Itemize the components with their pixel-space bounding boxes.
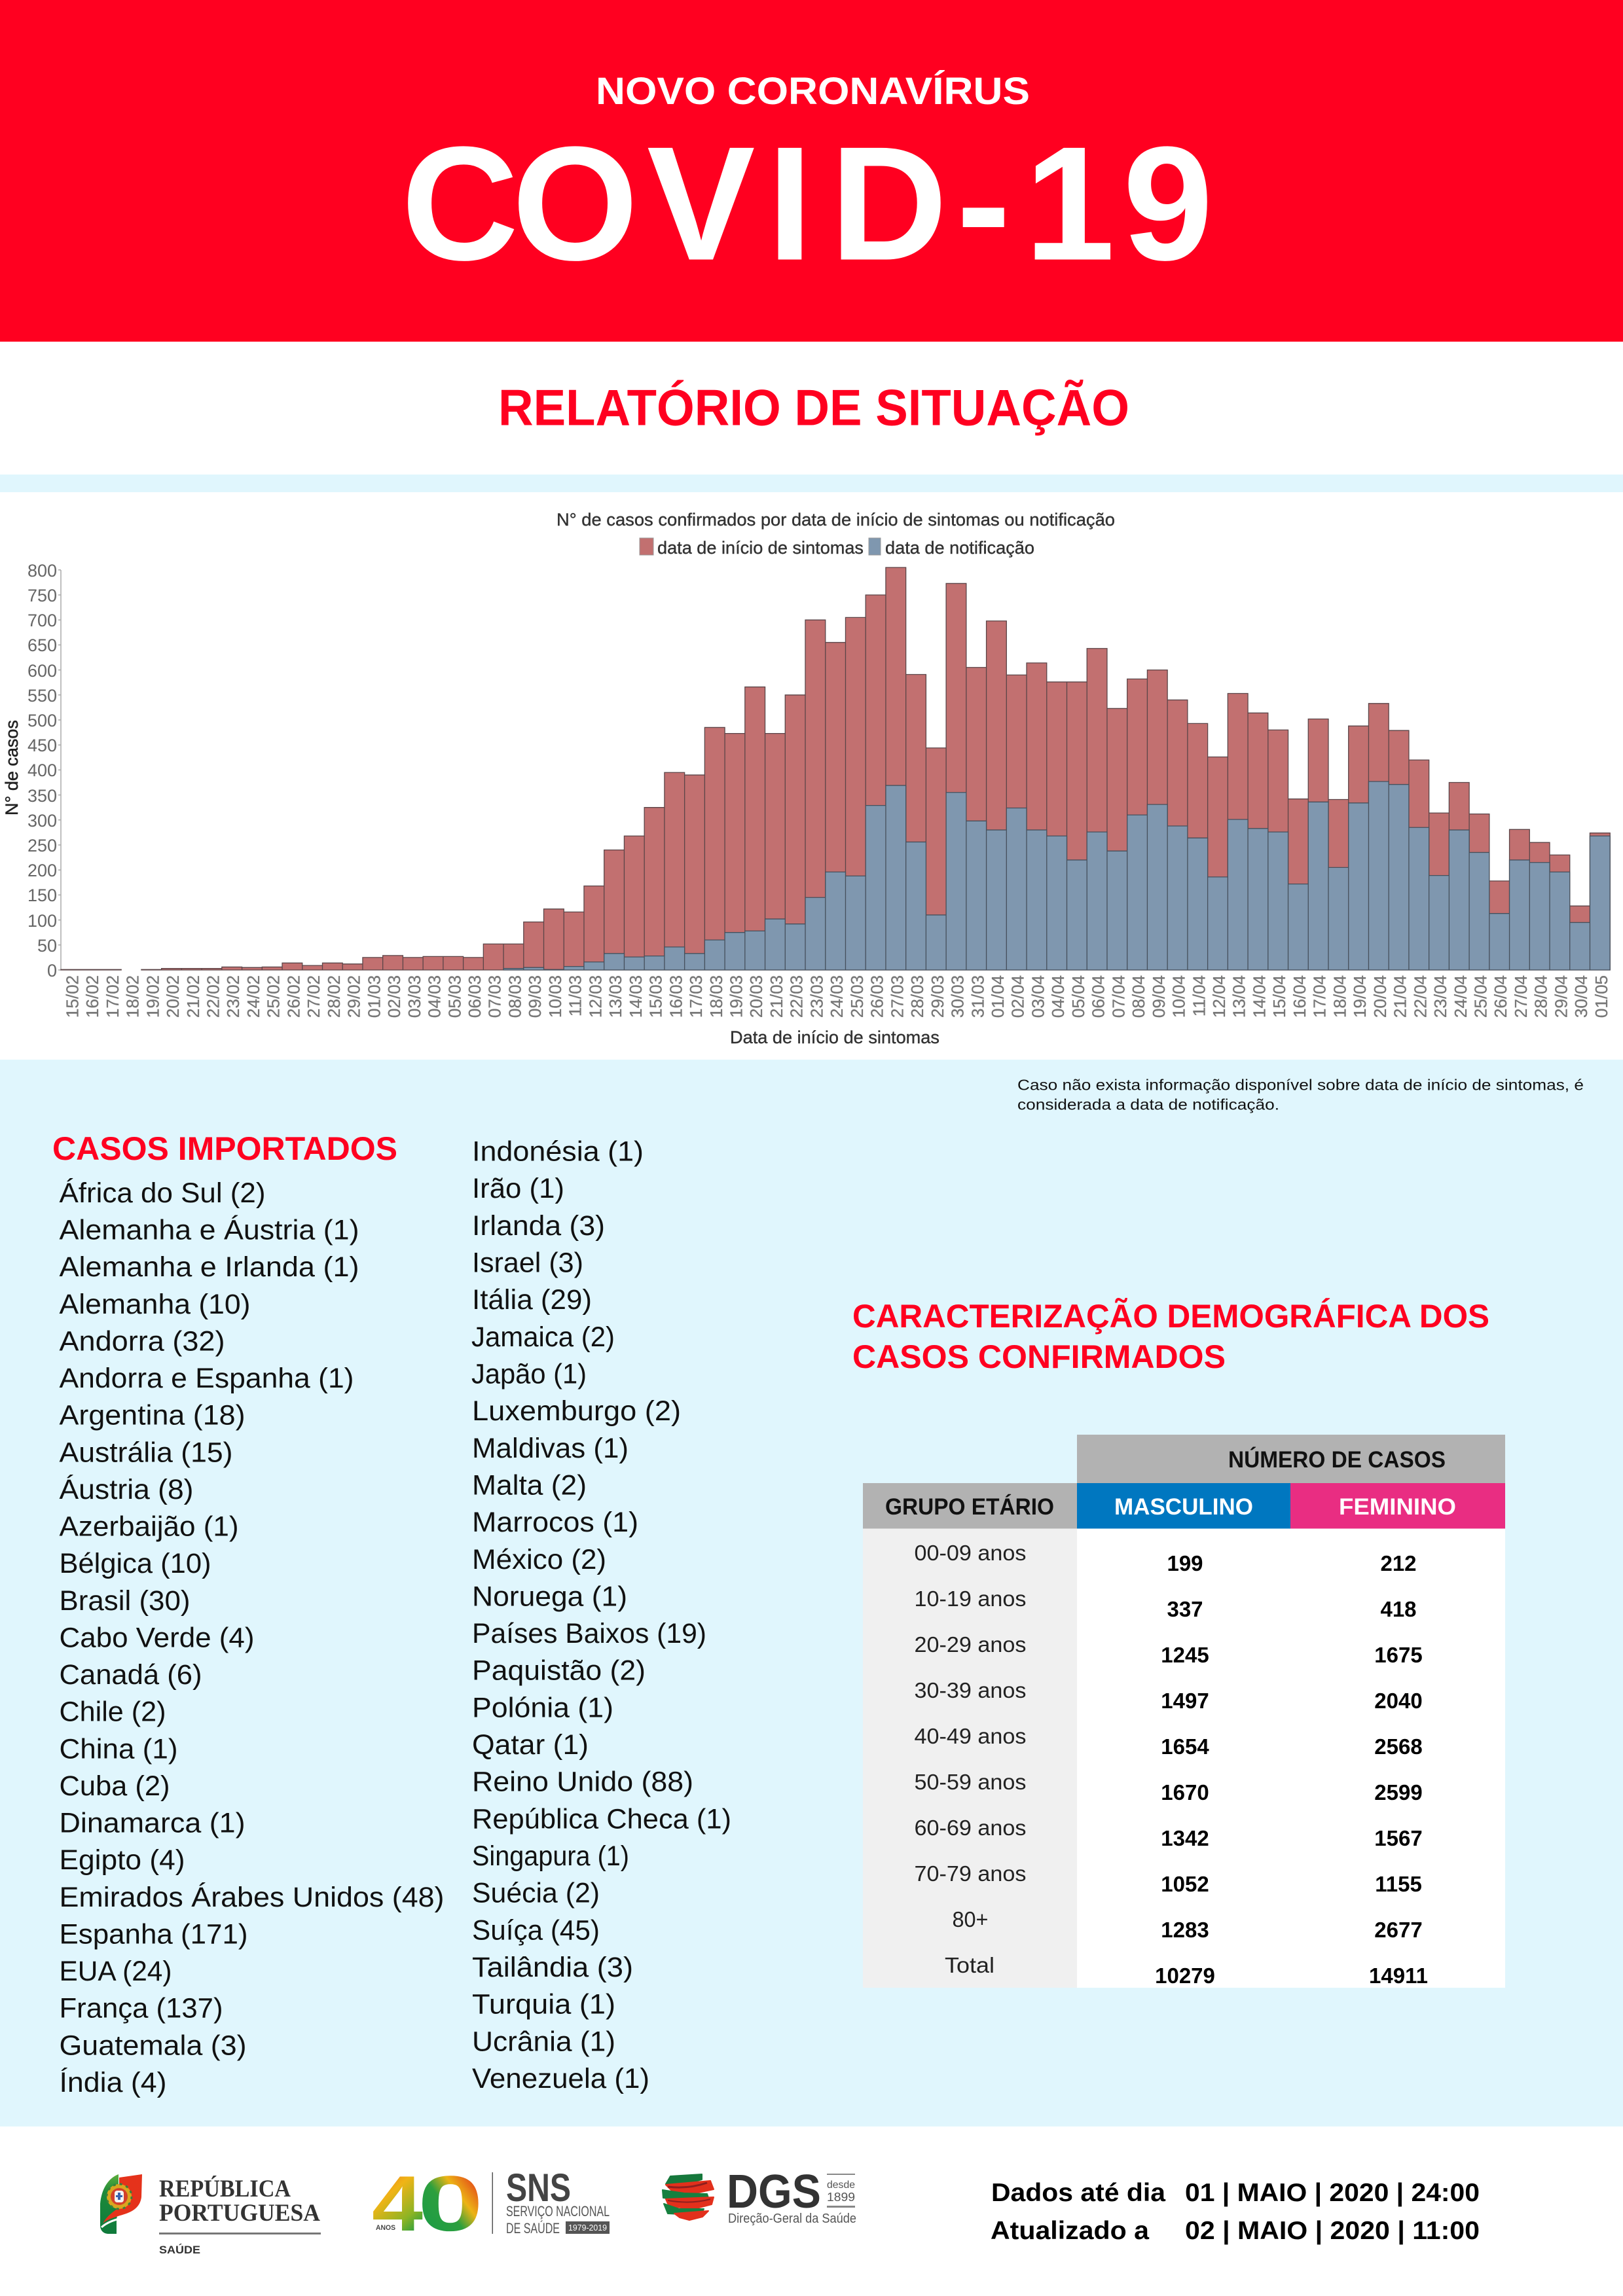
x axis date labels: 30/03 — [948, 975, 968, 1018]
x axis date labels: 07/03 — [485, 975, 505, 1018]
logo: SNS 40 anos: SERVIÇO NACIONAL — [506, 2203, 610, 2219]
y axis: 600 — [27, 661, 57, 681]
x axis date labels: 23/03 — [807, 975, 826, 1018]
list: imported cases, second column: Suécia (2) — [472, 1878, 600, 1909]
female case counts: 2568 — [1374, 1734, 1423, 1759]
x axis date labels: 01/05 — [1592, 975, 1611, 1018]
x axis date labels: 15/03 — [646, 975, 666, 1018]
age group column: 50-59 anos — [914, 1770, 1027, 1794]
x axis date labels: 20/02 — [163, 975, 183, 1018]
female case counts: 14911 — [1369, 1964, 1428, 1988]
x axis date labels: 14/04 — [1249, 975, 1269, 1018]
x axis date labels: 27/03 — [887, 975, 907, 1018]
x axis date labels: 28/03 — [907, 975, 927, 1018]
list: imported cases, second column: República Checa (1) — [472, 1803, 731, 1835]
list: imported cases, first column: Canadá (6) — [59, 1659, 202, 1691]
age group column: 60-69 anos — [914, 1816, 1027, 1840]
logo: SNS 40 anos: 4 — [372, 2160, 423, 2248]
male case counts: 1497 — [1161, 1689, 1209, 1713]
chart legend: data de início de sintomas — [657, 538, 864, 558]
logo: DGS: DGS — [727, 2166, 821, 2218]
x axis date labels: 18/04 — [1330, 975, 1349, 1018]
y axis: 0 — [47, 961, 57, 980]
x axis date labels: 21/04 — [1391, 975, 1410, 1018]
heading: caracterização demográfica: CARACTERIZAÇÃO DEMOGRÁFICA DOS — [852, 1298, 1489, 1335]
list: imported cases, first column: Chile (2) — [59, 1696, 166, 1728]
x axis date labels: 08/04 — [1129, 975, 1148, 1018]
table header: GRUPO ETÁRIO — [885, 1494, 1054, 1520]
y axis: 400 — [27, 761, 57, 780]
table header: NÚMERO DE CASOS — [1228, 1446, 1446, 1473]
x axis date labels: 28/02 — [324, 975, 344, 1018]
male case counts: 1283 — [1161, 1918, 1209, 1942]
list: imported cases, second column: Japão (1) — [471, 1359, 587, 1390]
y axis: 650 — [27, 636, 57, 655]
x axis date labels: 25/03 — [847, 975, 867, 1018]
x axis date labels: 03/03 — [405, 975, 424, 1018]
logo: SNS 40 anos: 1979-2019 — [568, 2223, 607, 2233]
panel: lower light-blue section — [0, 1060, 1623, 2126]
data dates — [991, 2179, 1480, 2245]
heading: caracterização demográfica — [852, 1298, 1489, 1375]
list: imported cases, second column: Irlanda (3) — [472, 1210, 605, 1242]
age group column: 20-29 anos — [914, 1632, 1027, 1657]
list: imported cases, second column: Maldivas (1) — [472, 1433, 629, 1464]
logo: República Portuguesa: SAÚDE — [159, 2244, 200, 2256]
list: imported cases, first column: Argentina (18) — [59, 1400, 245, 1431]
x axis date labels: 10/03 — [545, 975, 565, 1018]
chart footnote: considerada a data de notificação. — [1017, 1096, 1279, 1113]
female case counts: 1155 — [1375, 1872, 1422, 1896]
x axis date labels: 27/02 — [304, 975, 323, 1018]
list: imported cases, second column: Itália (29) — [472, 1284, 592, 1316]
x axis date labels: 24/03 — [827, 975, 847, 1018]
table header: MASCULINO — [1114, 1494, 1253, 1520]
female case counts: 2040 — [1374, 1689, 1423, 1713]
list: imported cases, second column: Luxemburgo (2) — [472, 1395, 681, 1427]
list: imported cases, second column: Reino Unido (88) — [472, 1767, 693, 1798]
x axis date labels: 22/03 — [787, 975, 807, 1018]
age group column: 30-39 anos — [914, 1678, 1027, 1702]
y axis: 150 — [27, 886, 57, 905]
female case counts: 418 — [1380, 1597, 1417, 1621]
y axis: 50 — [37, 936, 57, 956]
list: imported cases, first column: Andorra (32) — [59, 1326, 225, 1357]
icon: DGS globe — [663, 2174, 714, 2220]
list: imported cases, first column: Cabo Verde (4) — [59, 1622, 254, 1653]
data dates: Atualizado a — [991, 2217, 1149, 2245]
chart footnote: Caso não exista informação disponível sobre data de início de sintomas, é — [1017, 1076, 1584, 1093]
main title: COVID-19 — [401, 113, 1213, 295]
x axis date labels: 18/03 — [706, 975, 726, 1018]
list: imported cases, first column — [59, 1177, 444, 2098]
table header — [863, 1435, 1505, 1529]
data dates: Dados até dia — [991, 2179, 1165, 2207]
x axis date labels: 17/04 — [1310, 975, 1330, 1018]
logo: República Portuguesa: REPÚBLICA — [159, 2175, 291, 2202]
x axis date labels: 05/03 — [445, 975, 464, 1018]
subtitle: RELATÓRIO DE SITUAÇÃO — [498, 378, 1129, 436]
x axis date labels: 14/03 — [626, 975, 646, 1018]
x axis date labels: 26/03 — [867, 975, 887, 1018]
x axis date labels: 01/04 — [988, 975, 1008, 1018]
x axis date labels: 06/03 — [465, 975, 484, 1018]
age group column: 80+ — [952, 1907, 989, 1931]
x axis date labels: 03/04 — [1028, 975, 1048, 1018]
list: imported cases, first column: Guatemala (3) — [59, 2030, 246, 2061]
list: imported cases, first column: Austrália (15) — [59, 1437, 233, 1468]
logo: SNS 40 anos: DE SAÚDE — [506, 2220, 560, 2236]
x axis date labels: 17/02 — [103, 975, 122, 1018]
list: imported cases, second column: Marrocos (1) — [472, 1507, 638, 1538]
x axis date labels: 19/03 — [727, 975, 746, 1018]
female case counts: 2677 — [1374, 1918, 1423, 1942]
x axis date labels: 27/04 — [1511, 975, 1531, 1018]
x axis date labels: 06/04 — [1089, 975, 1108, 1018]
x axis date labels: 31/03 — [968, 975, 987, 1018]
x axis date labels: 13/03 — [606, 975, 625, 1018]
x axis date labels: 23/02 — [223, 975, 243, 1018]
male case counts: 1654 — [1161, 1734, 1209, 1759]
list: imported cases, second column: Israel (3) — [472, 1247, 583, 1279]
x axis date labels: 16/02 — [82, 975, 102, 1018]
x axis date labels: 25/02 — [264, 975, 283, 1018]
x axis date labels: 04/03 — [424, 975, 444, 1018]
logo: SNS 40 anos: SNS — [506, 2166, 571, 2210]
x axis date labels: 20/03 — [746, 975, 766, 1018]
y axis: 800 — [27, 561, 57, 581]
x axis date labels: 26/04 — [1491, 975, 1510, 1018]
age group column: 40-49 anos — [914, 1724, 1027, 1748]
male case counts: 199 — [1167, 1551, 1203, 1575]
list: imported cases, second column: Tailândia (3) — [472, 1952, 633, 1983]
male case counts — [1155, 1551, 1215, 1988]
list: imported cases, second column: México (2) — [472, 1544, 606, 1575]
x axis date labels: 30/04 — [1571, 975, 1591, 1018]
x axis date labels: 22/02 — [203, 975, 223, 1018]
x axis date labels: 19/04 — [1350, 975, 1370, 1018]
list: imported cases, first column: China (1) — [59, 1733, 178, 1765]
x axis date labels: 28/04 — [1531, 975, 1551, 1018]
x axis date labels: 29/02 — [344, 975, 364, 1018]
chart footnote — [1017, 1076, 1584, 1113]
x axis date labels: 20/04 — [1370, 975, 1390, 1018]
logo: DGS: desde — [827, 2179, 855, 2191]
heading: casos importados: CASOS IMPORTADOS — [52, 1130, 397, 1167]
y axis: 550 — [27, 686, 57, 706]
x axis date labels — [62, 975, 1611, 1018]
x axis date labels: 12/04 — [1209, 975, 1229, 1018]
bars: data de notificação — [503, 781, 1610, 970]
y axis: 300 — [27, 811, 57, 831]
x axis title: Data de início de sintomas — [730, 1028, 939, 1047]
list: imported cases, second column: Malta (2) — [472, 1469, 587, 1501]
chart legend: data de notificação — [885, 538, 1034, 558]
list: imported cases, first column: Azerbaijão (1) — [59, 1511, 238, 1543]
list: imported cases, second column: Venezuela (1) — [472, 2063, 649, 2094]
x axis date labels: 01/03 — [364, 975, 384, 1018]
list: imported cases, first column: Emirados Árabes Unidos (48) — [59, 1882, 444, 1913]
list: imported cases, first column: Alemanha e Irlanda (1) — [59, 1251, 359, 1283]
list: imported cases, first column: EUA (24) — [59, 1956, 172, 1987]
x axis date labels: 04/04 — [1048, 975, 1068, 1018]
list: imported cases, first column: Brasil (30) — [59, 1585, 190, 1617]
bars: data de início de sintomas — [61, 567, 1610, 970]
male case counts: 10279 — [1155, 1964, 1215, 1988]
list: imported cases, first column: Espanha (171) — [59, 1918, 247, 1950]
x axis date labels: 10/04 — [1169, 975, 1189, 1018]
list: imported cases, first column: Bélgica (10) — [59, 1548, 211, 1579]
x axis date labels: 21/03 — [767, 975, 786, 1018]
list: imported cases, first column: Cuba (2) — [59, 1770, 170, 1802]
x axis date labels: 23/04 — [1431, 975, 1450, 1018]
y axis: 250 — [27, 836, 57, 855]
x axis date labels: 17/03 — [686, 975, 706, 1018]
list: imported cases, second column: Paquistão (2) — [472, 1655, 646, 1687]
y axis: 750 — [27, 586, 57, 605]
age group column: 00-09 anos — [914, 1541, 1027, 1565]
list: imported cases, first column: Dinamarca (1) — [59, 1808, 245, 1839]
list: imported cases, first column: França (137) — [59, 1993, 223, 2024]
x axis date labels: 25/04 — [1470, 975, 1490, 1018]
x axis date labels: 05/04 — [1068, 975, 1088, 1018]
y axis title: N° de casos — [2, 720, 22, 816]
x axis date labels: 15/04 — [1269, 975, 1289, 1018]
y axis — [27, 561, 61, 980]
list: imported cases, second column: Turquia (1) — [472, 1989, 615, 2020]
x axis date labels: 24/04 — [1451, 975, 1470, 1018]
female case counts: 1675 — [1374, 1643, 1423, 1667]
male case counts: 1052 — [1161, 1872, 1209, 1896]
list: imported cases, first column: Andorra e Espanha (1) — [59, 1363, 354, 1394]
list: imported cases, first column: Áustria (8) — [59, 1474, 194, 1505]
list: imported cases, second column: Ucrânia (1) — [472, 2026, 615, 2057]
logo: DGS — [663, 2166, 856, 2226]
x axis date labels: 07/04 — [1108, 975, 1128, 1018]
list: imported cases, second column: Países Baixos (19) — [472, 1618, 706, 1649]
male case counts: 1342 — [1161, 1826, 1209, 1850]
list: imported cases, second column: Qatar (1) — [472, 1729, 589, 1761]
data dates: 02 | MAIO | 2020 | 11:00 — [1185, 2217, 1480, 2245]
age group column: 10-19 anos — [914, 1587, 1027, 1611]
logo: República Portuguesa — [100, 2174, 321, 2256]
female case counts: 1567 — [1374, 1826, 1423, 1850]
icon: Portuguese flag emblem — [100, 2174, 142, 2234]
demographic table — [863, 1435, 1505, 1988]
logo: SNS 40 anos: ANOS — [376, 2224, 395, 2232]
x axis date labels: 13/04 — [1230, 975, 1249, 1018]
list: imported cases, second column: Irão (1) — [472, 1173, 564, 1204]
male case counts: 1245 — [1161, 1643, 1209, 1667]
x axis date labels: 12/03 — [585, 975, 605, 1018]
x axis date labels: 26/02 — [283, 975, 303, 1018]
logo: DGS: 1899 — [827, 2191, 855, 2204]
age group column: Total — [945, 1953, 994, 1977]
logo: República Portuguesa: PORTUGUESA — [159, 2200, 320, 2227]
chart legend — [640, 538, 1034, 558]
y axis: 500 — [27, 711, 57, 730]
x axis date labels: 11/03 — [566, 975, 585, 1016]
table header: FEMININO — [1339, 1494, 1456, 1520]
x axis date labels: 22/04 — [1410, 975, 1430, 1018]
y axis: 700 — [27, 611, 57, 630]
x axis date labels: 16/03 — [666, 975, 685, 1018]
y axis: 450 — [27, 736, 57, 755]
list: imported cases, second column: Suíça (45) — [472, 1914, 600, 1946]
x axis date labels: 11/04 — [1189, 975, 1209, 1016]
logo: SNS 40 anos — [372, 2160, 610, 2248]
logo: DGS: Direção-Geral da Saúde — [728, 2212, 856, 2226]
x axis date labels: 15/02 — [62, 975, 82, 1018]
age group column — [863, 1529, 1077, 1988]
list: imported cases, first column: Índia (4) — [59, 2067, 166, 2098]
female case counts: 212 — [1380, 1551, 1417, 1575]
female case counts: 2599 — [1374, 1780, 1423, 1804]
supertitle: NOVO CORONAVÍRUS — [596, 70, 1030, 113]
header band — [0, 0, 1623, 342]
age group column: 70-79 anos — [914, 1861, 1027, 1886]
x axis date labels: 19/02 — [143, 975, 162, 1018]
x axis date labels: 09/03 — [525, 975, 545, 1018]
male case counts: 1670 — [1161, 1780, 1209, 1804]
chart title: N° de casos confirmados por data de início de sintomas ou notificação — [556, 510, 1115, 529]
x axis date labels: 29/04 — [1551, 975, 1571, 1018]
list: imported cases, second column: Singapura (1) — [472, 1840, 629, 1872]
y axis: 350 — [27, 786, 57, 806]
y axis: 100 — [27, 911, 57, 931]
x axis date labels: 16/04 — [1290, 975, 1309, 1018]
y axis: 200 — [27, 861, 57, 880]
list: imported cases, second column — [471, 1136, 731, 2094]
x axis date labels: 21/02 — [183, 975, 203, 1018]
list: imported cases, second column: Jamaica (2) — [471, 1321, 615, 1353]
x axis date labels: 29/03 — [928, 975, 947, 1018]
x axis date labels: 08/03 — [505, 975, 525, 1018]
list: imported cases, first column: Egipto (4) — [59, 1844, 185, 1876]
heading: caracterização demográfica: CASOS CONFIRMADOS — [852, 1338, 1226, 1375]
logo: SNS 40 anos: 0 — [418, 2160, 483, 2248]
x axis date labels: 02/04 — [1008, 975, 1028, 1018]
data dates: 01 | MAIO | 2020 | 24:00 — [1185, 2179, 1480, 2207]
male case counts: 337 — [1167, 1597, 1203, 1621]
list: imported cases, first column: Alemanha (10) — [59, 1289, 250, 1320]
list: imported cases, first column: África do Sul (2) — [59, 1177, 266, 1209]
list: imported cases, second column: Polónia (1) — [472, 1692, 613, 1723]
x axis date labels: 24/02 — [244, 975, 263, 1018]
x axis date labels: 18/02 — [123, 975, 143, 1018]
list: imported cases, second column: Indonésia (1) — [472, 1136, 644, 1168]
x axis date labels: 09/04 — [1149, 975, 1169, 1018]
x axis date labels: 02/03 — [384, 975, 404, 1018]
female case counts — [1369, 1551, 1428, 1988]
list: imported cases, second column: Noruega (1) — [472, 1581, 627, 1612]
panel: epidemic curve chart — [0, 492, 1623, 1060]
list: imported cases, first column: Alemanha e Áustria (1) — [59, 1215, 359, 1246]
